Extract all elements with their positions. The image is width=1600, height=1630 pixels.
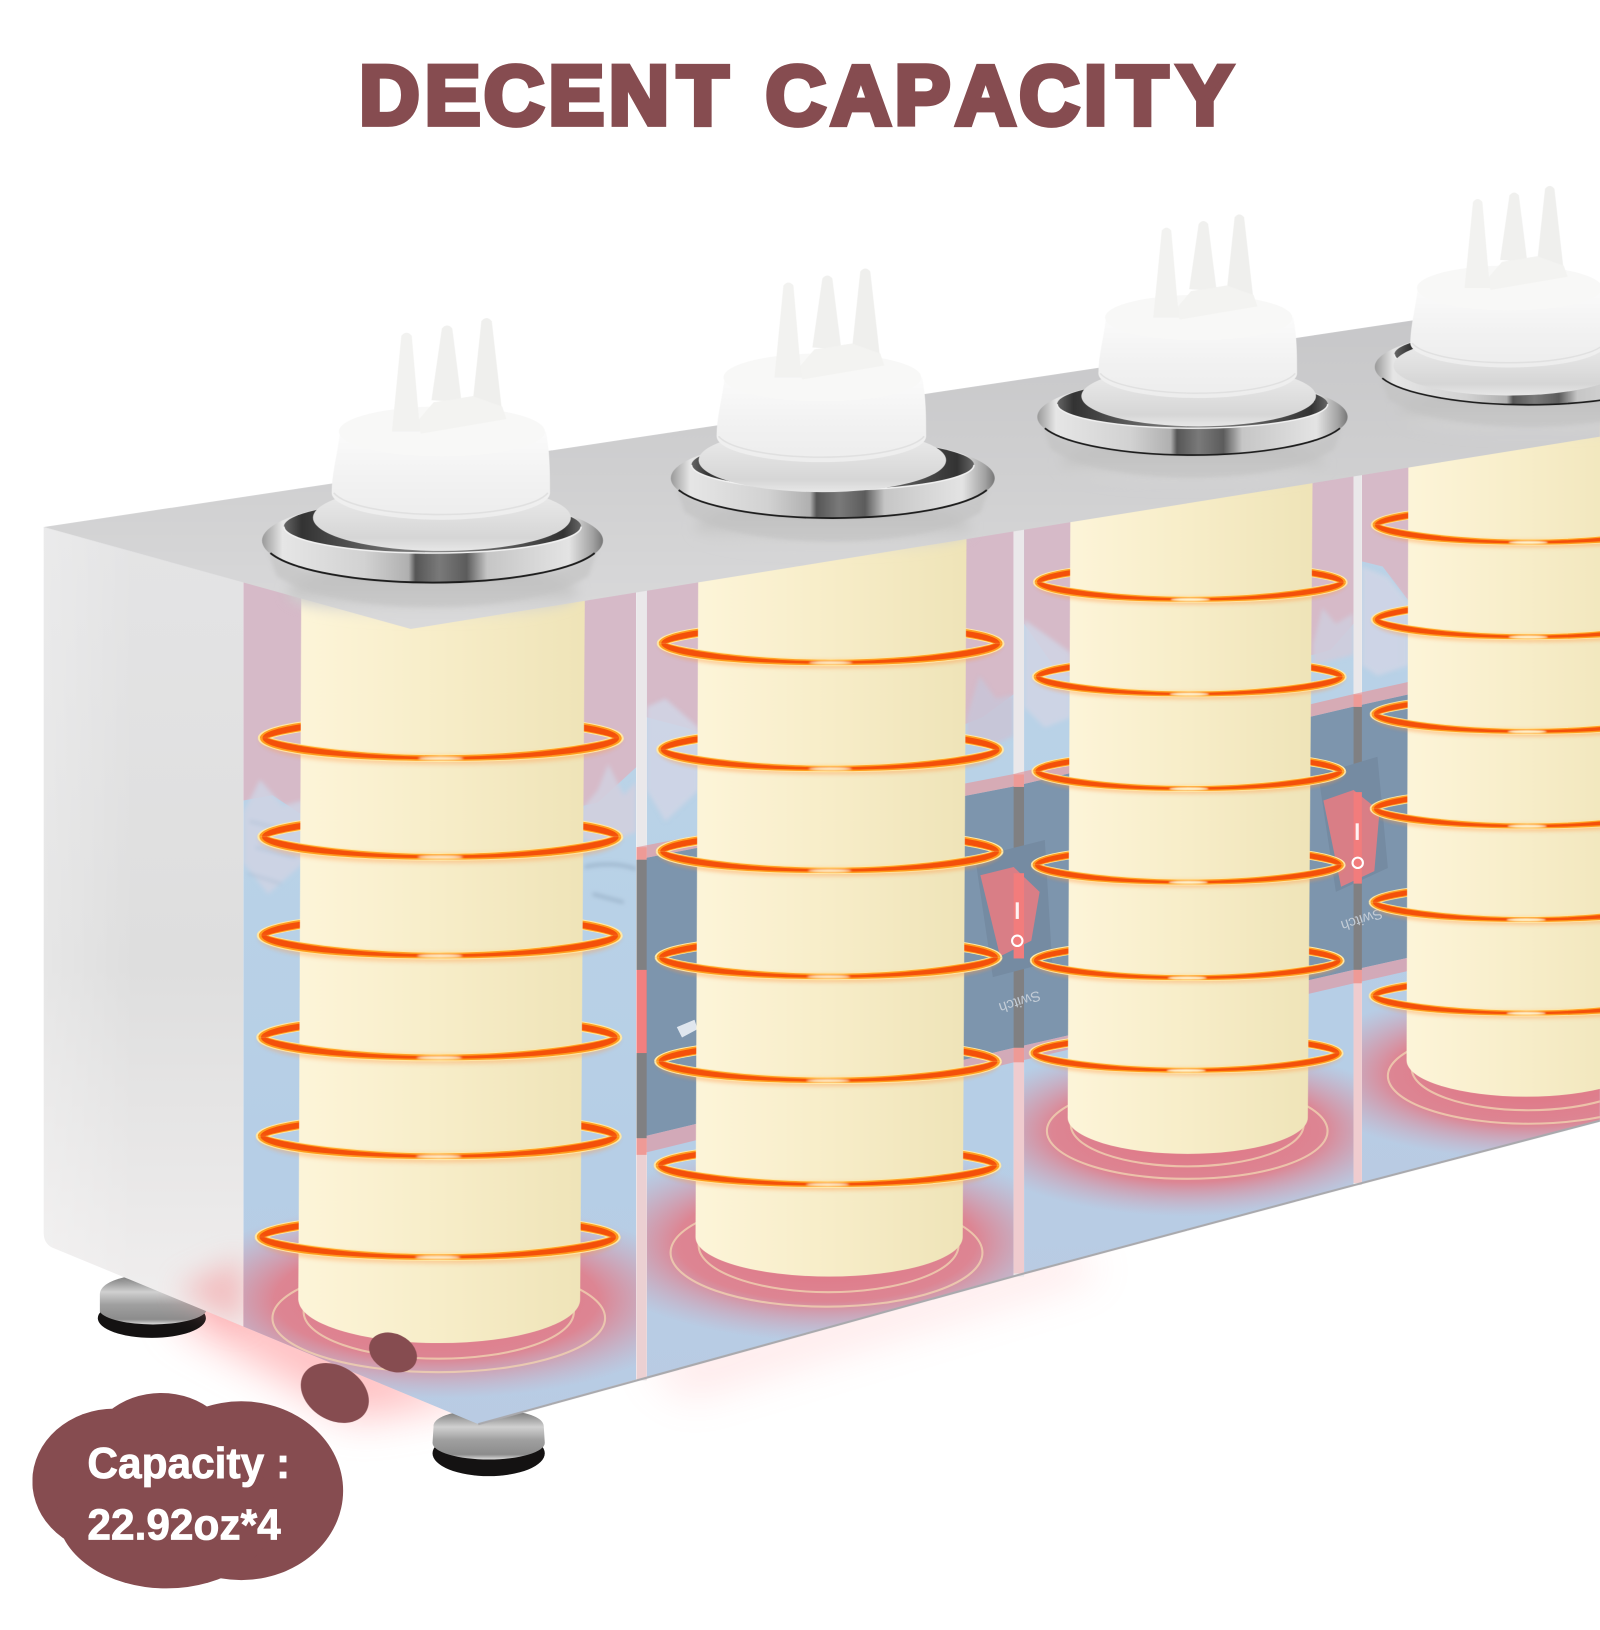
- pink upper chamber 2: [646, 532, 1014, 732]
- bottle 1 body: [298, 520, 585, 1343]
- dividers between chambers: [636, 457, 1362, 1381]
- control panel seen through the unit: [636, 639, 1600, 1155]
- collar 1: [262, 498, 603, 620]
- callout: capacity: [32, 1325, 424, 1588]
- heating coils: bottle 1: [255, 738, 624, 1261]
- heating coils: bottle 3: [1029, 582, 1348, 1074]
- top plate: [44, 292, 1600, 629]
- panel: cutaway chamber 4: [1362, 468, 1600, 1182]
- collar 2: [671, 438, 995, 553]
- base heat glow 1: [244, 1231, 636, 1392]
- capacity value: 22.92oz*4: [87, 1501, 281, 1550]
- panel: cutaway chamber 3: [1024, 476, 1354, 1272]
- water splash 3: [1024, 608, 1354, 728]
- bottle 4 body: [1407, 364, 1600, 1097]
- panel: cutaway chamber 2: [646, 532, 1014, 1376]
- heating coils: bottle 2: [654, 643, 1004, 1188]
- pink upper chamber 4: [1362, 468, 1408, 600]
- foot: front: [433, 1410, 545, 1476]
- base heat glow 4: [1362, 1010, 1600, 1151]
- capacity label: Capacity :: [87, 1439, 290, 1488]
- rocker switch: far left: [636, 970, 647, 1053]
- water splash 4: [1362, 567, 1409, 676]
- bottom edge of the unit: [478, 1121, 1600, 1424]
- heating coil rear arcs: [255, 504, 1600, 1237]
- base heat glow 2: [646, 1166, 1014, 1334]
- bottle cap 1: [313, 318, 571, 551]
- heat glow under the unit: [177, 1247, 1102, 1419]
- cloud shape: [32, 1393, 343, 1588]
- collar 4: [1375, 329, 1600, 438]
- water splash 2: [647, 676, 1014, 821]
- thought bubble small: [363, 1325, 424, 1380]
- switch label: right: Switch: [1339, 905, 1384, 933]
- white label: far left: [677, 1020, 698, 1037]
- panel: cutaway chamber 1: [244, 582, 636, 1424]
- collar 3: [1037, 378, 1348, 489]
- left side face: [44, 527, 243, 1326]
- bottle 3 body: [1068, 416, 1313, 1154]
- switch label: middle: Switch: [997, 987, 1042, 1015]
- bottle cap 4: [1393, 186, 1600, 396]
- bottle cap 2: [699, 269, 946, 492]
- heating coils: bottle 4: [1369, 525, 1600, 1016]
- base heat glow 3: [1024, 1068, 1354, 1210]
- foot: left: [98, 1274, 206, 1338]
- bottle cap 3: [1081, 214, 1316, 426]
- water splash 1: [243, 764, 636, 902]
- rocker switch: right: [1318, 757, 1388, 892]
- divider pink lower sections: [636, 983, 1362, 1379]
- bottle 2 body: [696, 468, 967, 1277]
- title: DECENT CAPACITY: [359, 49, 1233, 142]
- pink upper chamber 1: [244, 582, 636, 806]
- rocker switch: middle: [975, 840, 1052, 977]
- pink upper chamber 3: [1024, 476, 1354, 676]
- thought bubble medium: [290, 1351, 380, 1435]
